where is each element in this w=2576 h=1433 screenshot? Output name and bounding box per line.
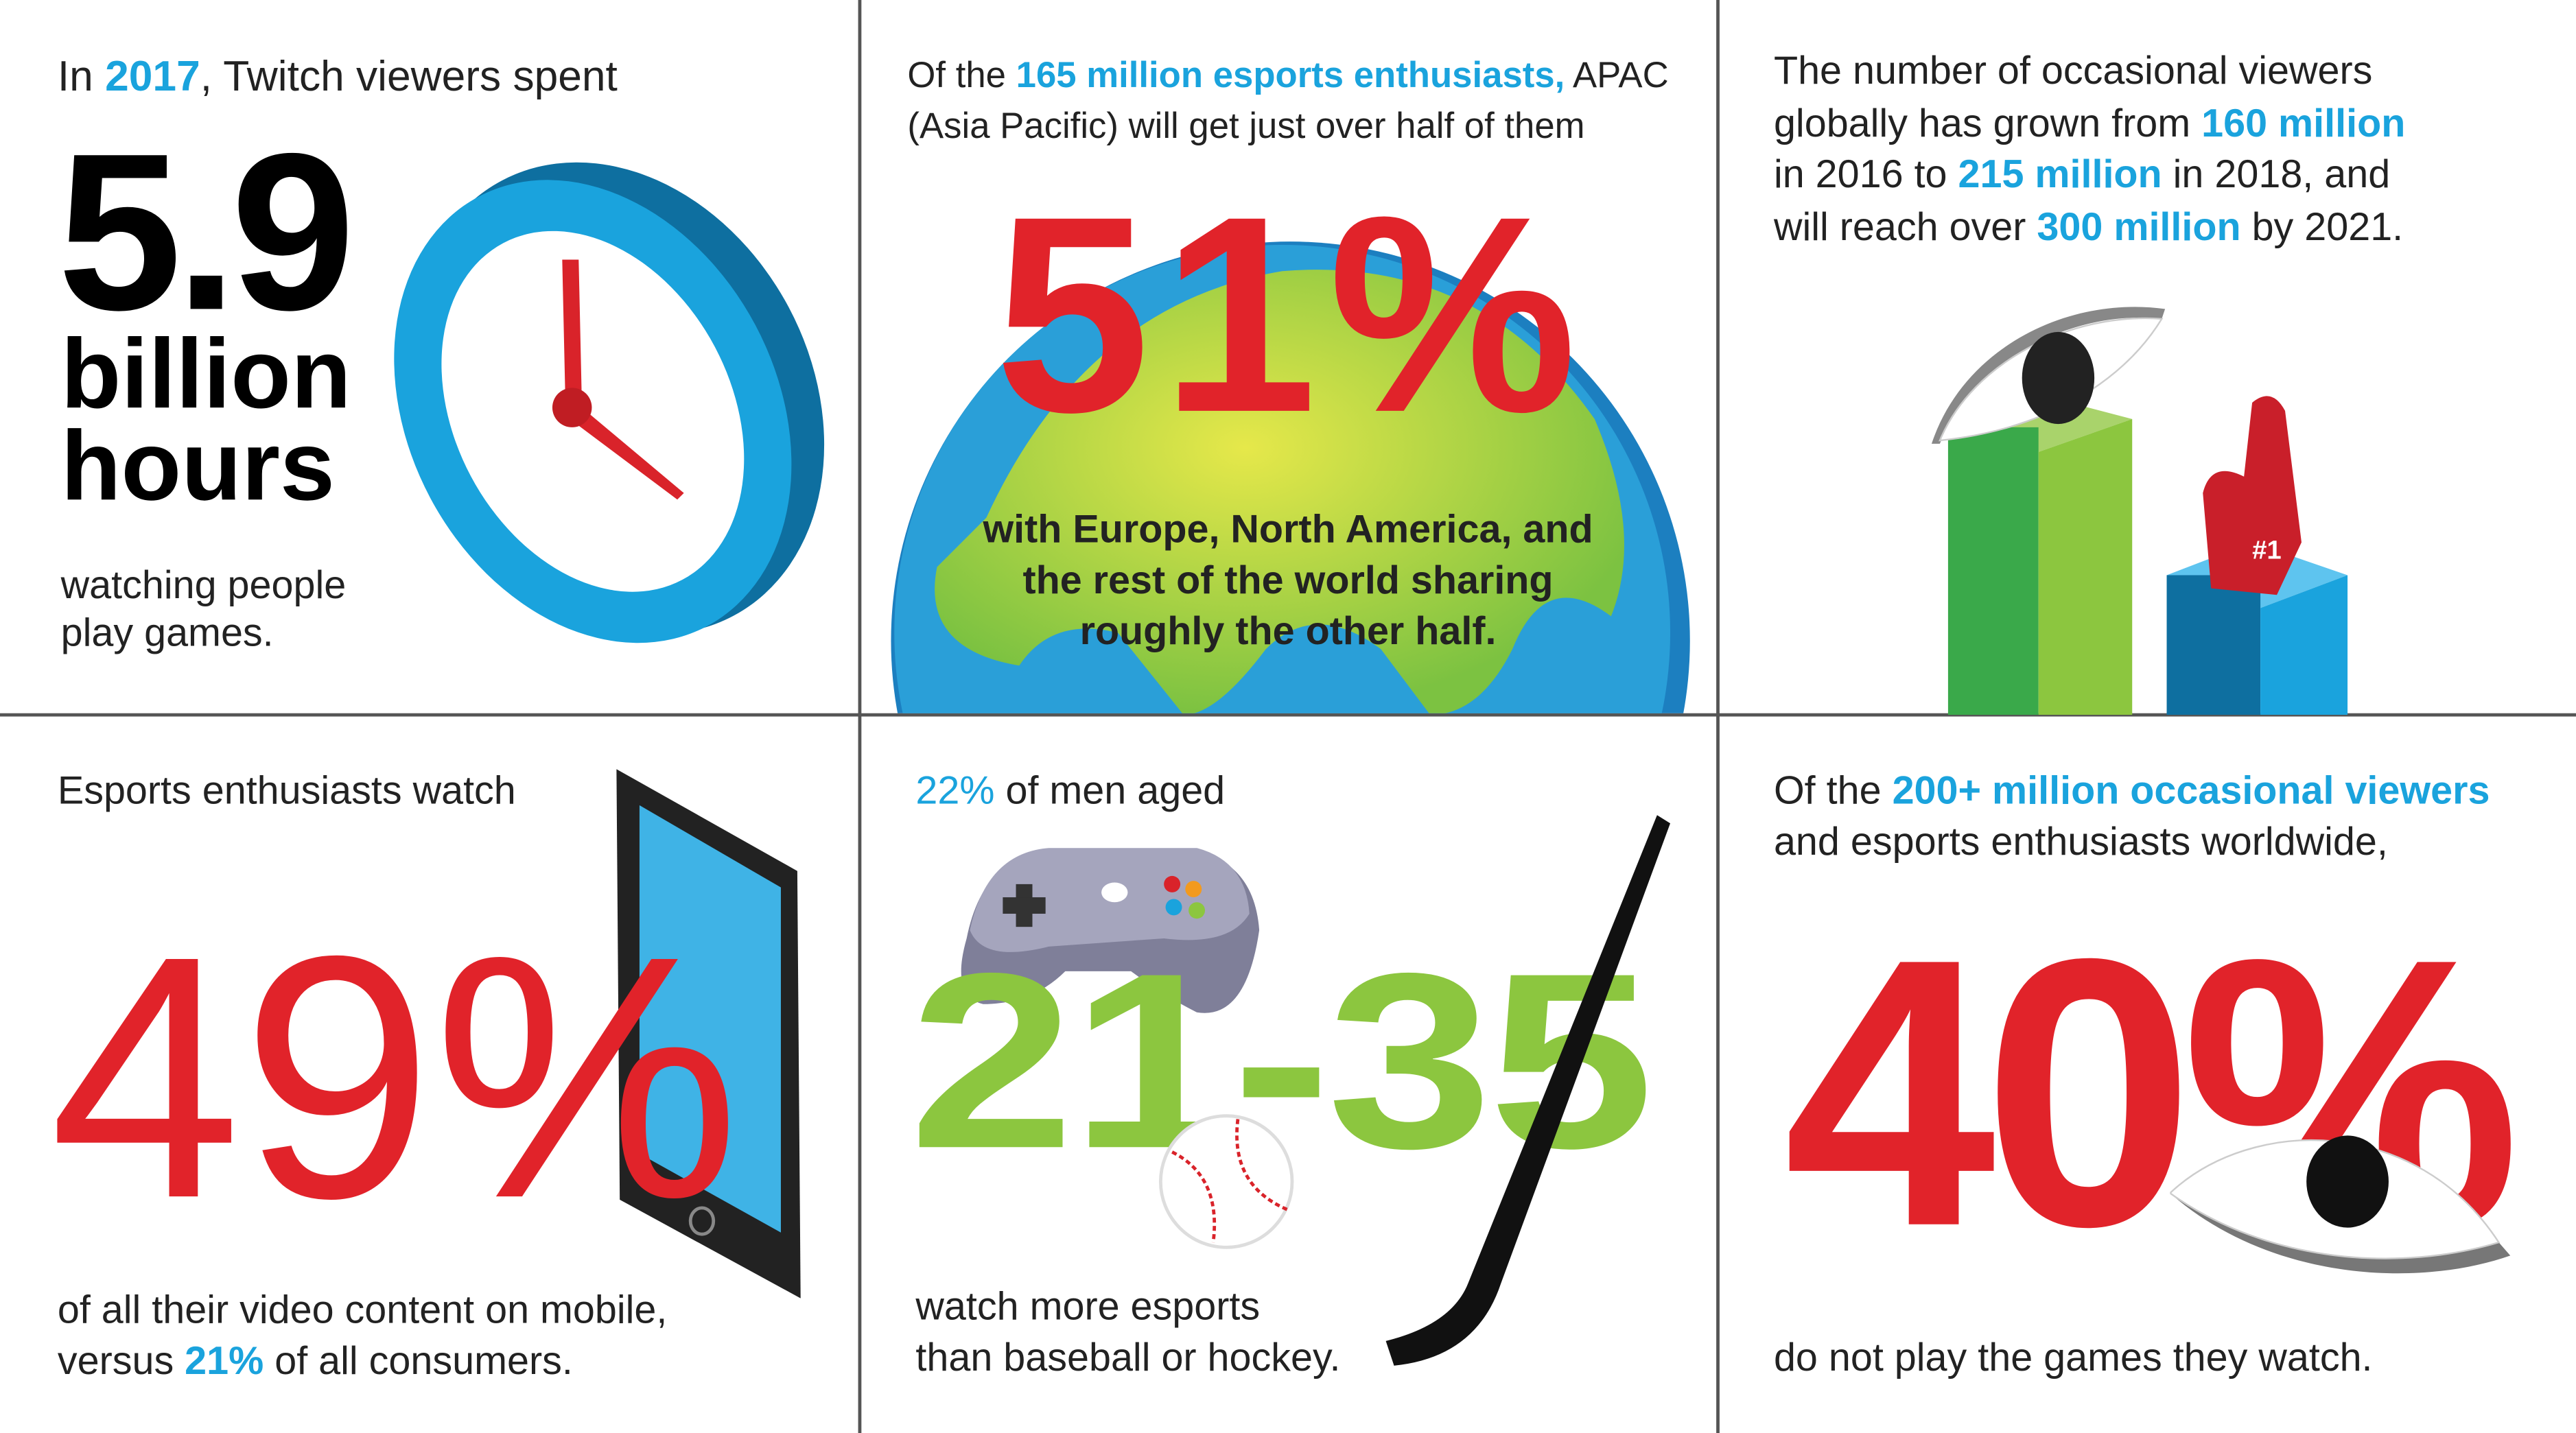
text: versus [58, 1288, 667, 1384]
text: watch more [915, 1285, 1340, 1380]
text: intro: and esports enthusiasts worldwide, [1774, 820, 2388, 864]
text: rest of world: the rest of the world sharing [1022, 559, 1554, 603]
chart: bars: #1 [2252, 536, 2282, 565]
panel: mobile [49, 769, 801, 1384]
text: versus: of all their video content on mobile, [58, 1288, 667, 1333]
icon: eye [2170, 1135, 2510, 1273]
text: intro: In 2017, Twitch viewers spent [58, 51, 618, 100]
panel: men aged [909, 769, 1670, 1380]
text: growth: The number of occasional viewers [1774, 49, 2372, 94]
text: watching [60, 564, 346, 656]
icon: globe [891, 241, 1690, 713]
stat: 21-35: 21-35 [909, 922, 1650, 1201]
text: do not play: do not play the games they watch. [1774, 1336, 2373, 1380]
stat: billion hours [61, 319, 351, 521]
text: versus: versus 21% of all consumers. [58, 1339, 573, 1384]
text: rest of world: with Europe, North America, and [983, 508, 1593, 552]
text: rest of world [983, 508, 1593, 654]
text: growth [1773, 49, 2405, 249]
stat: 49%: 49% [49, 884, 740, 1270]
text: watching: watching people [61, 564, 346, 608]
icon: baseball [1159, 1114, 1294, 1249]
text: growth: globally has grown from 160 million [1774, 101, 2405, 145]
stat: 51%: 51% [994, 159, 1589, 472]
text: growth: in 2016 to 215 million in 2018, and [1774, 153, 2390, 197]
text: rest of world: roughly the other half. [1080, 610, 1496, 654]
icon: hockey stick [1386, 815, 1670, 1366]
stat: 5.9: 5.9 [58, 107, 349, 357]
text: growth: will reach over 300 million by 2021. [1774, 204, 2403, 249]
icon: controller [961, 848, 1260, 1013]
stat: billion hours: hours [61, 411, 335, 521]
text: intro: 22% of men aged [915, 769, 1225, 814]
text: intro: Esports enthusiasts watch [58, 769, 516, 814]
stat: billion hours: billion [61, 319, 351, 429]
text: intro: Of the 200+ million occasional viewers [1774, 769, 2490, 814]
text: watching: play games. [61, 611, 274, 656]
text: watch more: than baseball or hockey. [915, 1336, 1340, 1380]
text: intro: Of the 165 million esports enthusiasts, APAC [907, 54, 1669, 95]
stat: 40%: 40% [1783, 881, 2507, 1307]
text: intro [1774, 769, 2490, 864]
chart: bars [1932, 307, 2348, 715]
panel: APAC [891, 54, 1690, 713]
text: intro: (Asia Pacific) will get just over half of them [907, 105, 1585, 146]
text: watch more: watch more esports [915, 1285, 1260, 1329]
icon: clock [394, 162, 825, 643]
text: intro [907, 54, 1669, 146]
panel: non-players [1774, 769, 2511, 1380]
panel: twitch hours [58, 51, 825, 656]
icon: tablet [616, 769, 801, 1299]
panel: occasional viewers [1773, 49, 2405, 715]
